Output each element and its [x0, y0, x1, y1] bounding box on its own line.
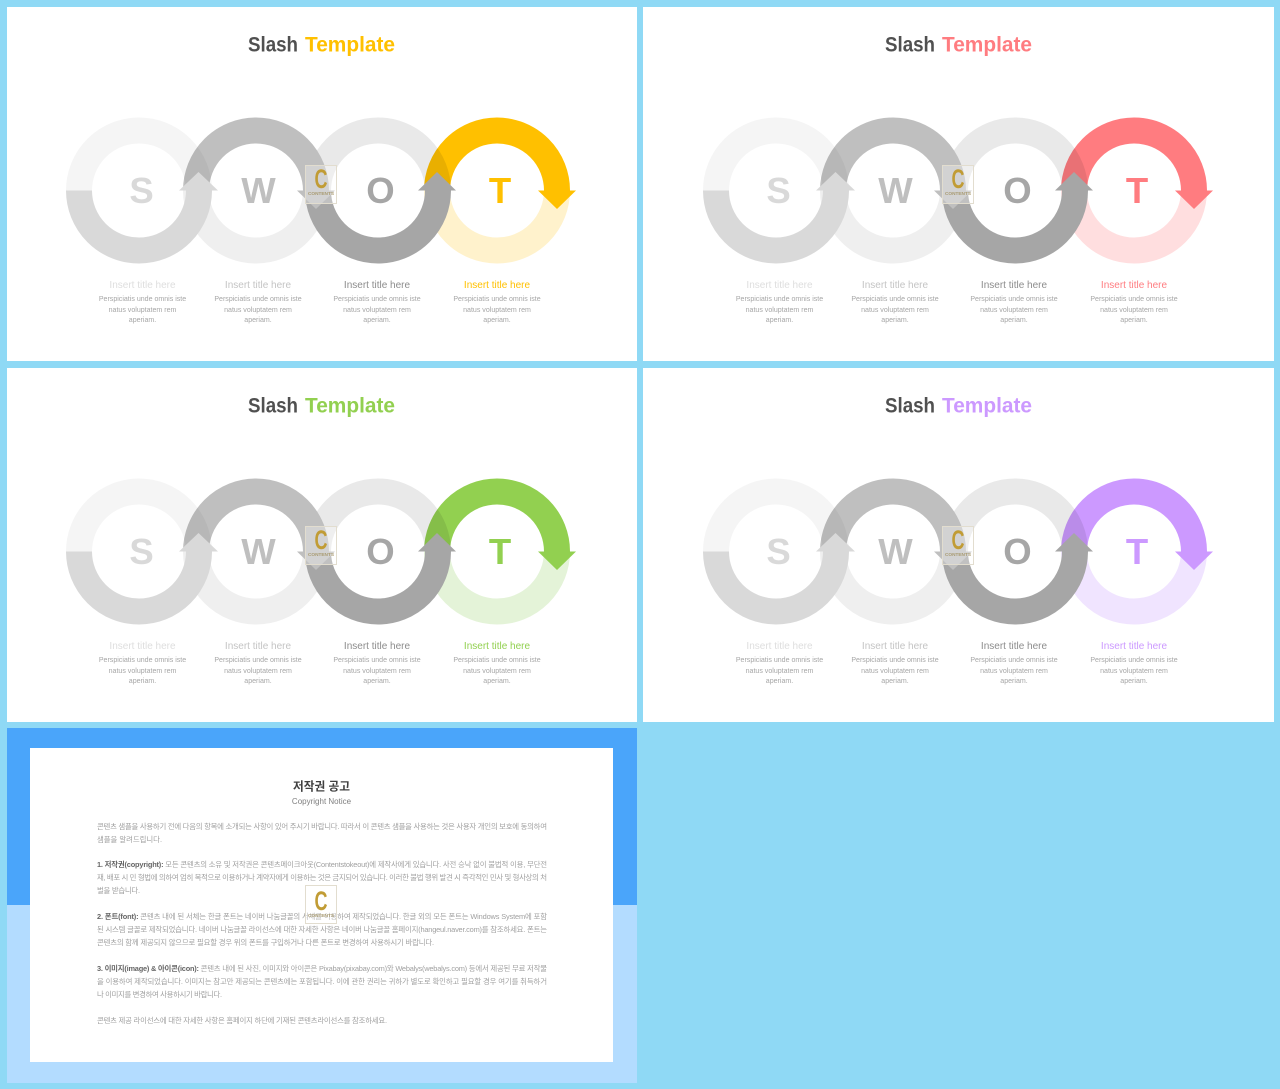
captions: Perspiciatis unde omnis iste	[99, 657, 186, 664]
heading: Slash Template	[248, 394, 395, 418]
SWOT chain diagram: O	[1003, 531, 1032, 572]
notice section 1	[97, 860, 547, 895]
watermark: C	[952, 164, 964, 194]
captions: Insert title here	[344, 641, 411, 652]
notice section 2: 콘텐츠의 함께 제공되지 않으므로 필요할 경우 위의 폰트를 구입하거나 다른 폰트로 변경하여 사용하시기 바랍니다.	[97, 938, 434, 947]
captions: natus voluptatem rem	[746, 668, 814, 675]
captions: aperiam.	[766, 317, 793, 324]
captions: aperiam.	[129, 678, 156, 685]
notice section 2: 2. 폰트(font): 콘텐츠 내에 된 서체는 한글 폰트는 네이버 나눔글꼴의 서체를 이용하여 제작되었습니다. 한글 외의 모든 폰트는 Windows System에 포함	[97, 912, 547, 921]
notice section 2: 된 시스템 글꼴로 제작되었습니다. 네이버 나눔글꼴 라이선스에 대한 자세한 사항은 네이버 나눔글꼴 홈페이지(hangeul.naver.com)를 참조하세요. 폰트는	[97, 925, 547, 934]
captions: aperiam.	[1120, 678, 1148, 685]
notice intro text: 콘텐츠 샘플을 사용하기 전에 다음의 항목에 소개되는 사항이 있어 주시기 바랍니다. 따라서 이 콘텐츠 샘플을 사용하는 것은 사용자 개인의 보호에 동의하여	[97, 822, 547, 831]
watermark: CONTENTS	[308, 191, 334, 196]
panel: green SWOT	[7, 368, 637, 722]
watermark: CONTENTS	[308, 913, 334, 918]
captions: Perspiciatis unde omnis iste	[970, 657, 1058, 664]
captions: Perspiciatis unde omnis iste	[453, 657, 541, 664]
SWOT chain diagram: S	[129, 531, 154, 572]
captions: natus voluptatem rem	[463, 307, 531, 314]
notice section 3: 을 이용하여 제작되었습니다. 이미지는 참고만 제공되는 콘텐츠에는 포함됩니다. 이에 관한 권리는 귀하가 별도로 확인하고 필요할 경우 여기를 취득하거	[97, 977, 547, 986]
captions: Perspiciatis unde omnis iste	[214, 296, 302, 303]
watermark: CONTENTS	[945, 552, 971, 557]
SWOT chain diagram: O	[366, 531, 395, 572]
captions: Perspiciatis unde omnis iste	[453, 296, 541, 303]
heading: Slash Template	[248, 34, 395, 56]
watermark: CONTENTS	[945, 191, 971, 196]
captions: natus voluptatem rem	[343, 668, 411, 675]
watermark: C	[952, 525, 964, 555]
captions: Insert title here	[344, 280, 411, 291]
watermark	[942, 525, 974, 564]
SWOT chain diagram: W	[878, 170, 913, 211]
captions: aperiam.	[129, 317, 156, 324]
captions: Insert title here	[862, 641, 929, 652]
captions: Perspiciatis unde omnis iste	[214, 657, 302, 664]
captions: natus voluptatem rem	[109, 307, 177, 314]
notice section 3: 나 이미지를 변경하여 사용하시기 바랍니다.	[97, 990, 222, 999]
captions: aperiam.	[1000, 317, 1028, 324]
notice section 2	[97, 912, 547, 947]
captions: natus voluptatem rem	[861, 307, 929, 314]
SWOT chain diagram: T	[1126, 531, 1148, 572]
heading: Slash Template	[885, 34, 1032, 56]
SWOT chain diagram: O	[366, 170, 395, 211]
captions: aperiam.	[1120, 317, 1148, 324]
captions: Insert title here	[981, 641, 1048, 652]
captions: aperiam.	[881, 317, 909, 324]
captions: natus voluptatem rem	[1100, 307, 1168, 314]
captions: natus voluptatem rem	[224, 668, 292, 675]
watermark: C	[314, 164, 328, 194]
notice footer: 콘텐츠 제공 라이선스에 대한 자세한 사항은 홈페이지 하단에 기재된 콘텐츠라이선스를 참조하세요.	[97, 1016, 387, 1025]
captions	[736, 641, 1178, 685]
panel: pink SWOT	[643, 7, 1274, 361]
heading: Slash Template	[885, 394, 1032, 418]
captions: aperiam.	[363, 317, 391, 324]
captions: Perspiciatis unde omnis iste	[1090, 657, 1178, 664]
captions: natus voluptatem rem	[224, 307, 292, 314]
watermark	[942, 164, 974, 204]
captions: natus voluptatem rem	[463, 668, 531, 675]
heading: Slash Template: Slash	[248, 394, 298, 418]
notice section 1: 1. 저작권(copyright): 모든 콘텐츠의 소유 및 저작권은 콘텐츠메이크아웃(Contentstokeout)에 제작사에게 있습니다. 사전 승낙 없이 불법적 이용, 무단전	[97, 860, 547, 869]
SWOT chain diagram	[716, 130, 1213, 251]
heading: Slash Template: Slash	[885, 394, 935, 418]
captions: Perspiciatis unde omnis iste	[99, 296, 186, 303]
SWOT chain diagram: S	[129, 170, 154, 211]
captions: Insert title here	[1101, 280, 1168, 291]
captions: natus voluptatem rem	[980, 307, 1048, 314]
captions: natus voluptatem rem	[1100, 668, 1168, 675]
captions: aperiam.	[483, 678, 511, 685]
captions: Insert title here	[862, 280, 929, 291]
captions: aperiam.	[881, 678, 909, 685]
captions: aperiam.	[244, 317, 272, 324]
SWOT chain diagram: O	[1003, 170, 1032, 211]
SWOT chain diagram: T	[489, 531, 511, 572]
captions: Insert title here	[464, 280, 531, 291]
captions: Insert title here	[1101, 641, 1168, 652]
watermark: CONTENTS	[308, 552, 334, 557]
captions: Perspiciatis unde omnis iste	[970, 296, 1058, 303]
notice subtitle: Copyright Notice	[292, 797, 352, 806]
SWOT chain diagram: W	[241, 531, 276, 572]
captions: aperiam.	[244, 678, 272, 685]
watermark	[306, 164, 336, 204]
SWOT chain diagram: W	[878, 531, 913, 572]
captions: Insert title here	[746, 280, 813, 291]
SWOT chain diagram: S	[766, 531, 791, 572]
panel: yellow SWOT	[7, 7, 637, 361]
notice title: 저작권 공고	[293, 780, 350, 794]
captions: Perspiciatis unde omnis iste	[333, 296, 421, 303]
captions: Perspiciatis unde omnis iste	[736, 296, 823, 303]
SWOT chain diagram	[79, 130, 576, 251]
notice section 3: 3. 이미지(image) & 아이콘(icon): 콘텐츠 내에 된 사진, 이미지와 아이콘은 Pixabay(pixabay.com)와 Webalys(webalys.com) 등에서 제공된 무료 저작물	[97, 964, 547, 973]
captions: Perspiciatis unde omnis iste	[851, 657, 939, 664]
captions	[736, 280, 1178, 324]
notice section 3	[97, 964, 547, 999]
SWOT chain diagram: S	[766, 170, 791, 211]
watermark: C	[314, 886, 328, 916]
captions: Perspiciatis unde omnis iste	[333, 657, 421, 664]
captions: Perspiciatis unde omnis iste	[1090, 296, 1178, 303]
SWOT chain diagram: T	[1126, 170, 1148, 211]
captions: Perspiciatis unde omnis iste	[736, 657, 823, 664]
watermark	[306, 886, 336, 924]
heading: Slash Template: Template	[305, 34, 395, 56]
heading: Slash Template: Slash	[885, 34, 935, 56]
captions: natus voluptatem rem	[861, 668, 929, 675]
heading: Slash Template: Template	[942, 394, 1032, 418]
captions: aperiam.	[1000, 678, 1028, 685]
captions: natus voluptatem rem	[109, 668, 177, 675]
captions: Insert title here	[981, 280, 1048, 291]
captions: Insert title here	[109, 280, 176, 291]
captions: Insert title here	[464, 641, 531, 652]
SWOT chain diagram: T	[489, 170, 511, 211]
watermark: C	[314, 525, 328, 555]
notice intro text: 샘플을 알려드립니다.	[97, 835, 162, 844]
captions: Insert title here	[746, 641, 813, 652]
captions: aperiam.	[483, 317, 511, 324]
SWOT chain diagram: W	[241, 170, 276, 211]
panel: copyright notice	[7, 728, 637, 1083]
captions: natus voluptatem rem	[980, 668, 1048, 675]
panel: purple SWOT	[643, 368, 1274, 722]
heading: Slash Template: Template	[305, 394, 395, 418]
captions	[99, 280, 541, 324]
watermark	[306, 525, 336, 564]
SWOT chain diagram	[79, 492, 576, 612]
captions	[99, 641, 541, 685]
notice intro text	[97, 822, 547, 844]
captions: Insert title here	[109, 641, 176, 652]
captions: natus voluptatem rem	[746, 307, 814, 314]
captions: Insert title here	[225, 641, 292, 652]
captions: aperiam.	[363, 678, 391, 685]
captions: Perspiciatis unde omnis iste	[851, 296, 939, 303]
captions: aperiam.	[766, 678, 793, 685]
captions: Insert title here	[225, 280, 292, 291]
notice section 1: 벌을 받습니다.	[97, 886, 140, 895]
heading: Slash Template: Template	[942, 34, 1032, 56]
SWOT chain diagram	[716, 492, 1213, 612]
notice section 1: 재, 배포 시 민 형법에 의하여 엄히 목적으로 이용하거나 계약자에게 이용하는 것은 금지되어 있습니다. 이러한 불법 행위 발견 시 즉각적인 민사 및 형사상의 처	[97, 873, 547, 882]
heading: Slash Template: Slash	[248, 34, 298, 56]
captions: natus voluptatem rem	[343, 307, 411, 314]
